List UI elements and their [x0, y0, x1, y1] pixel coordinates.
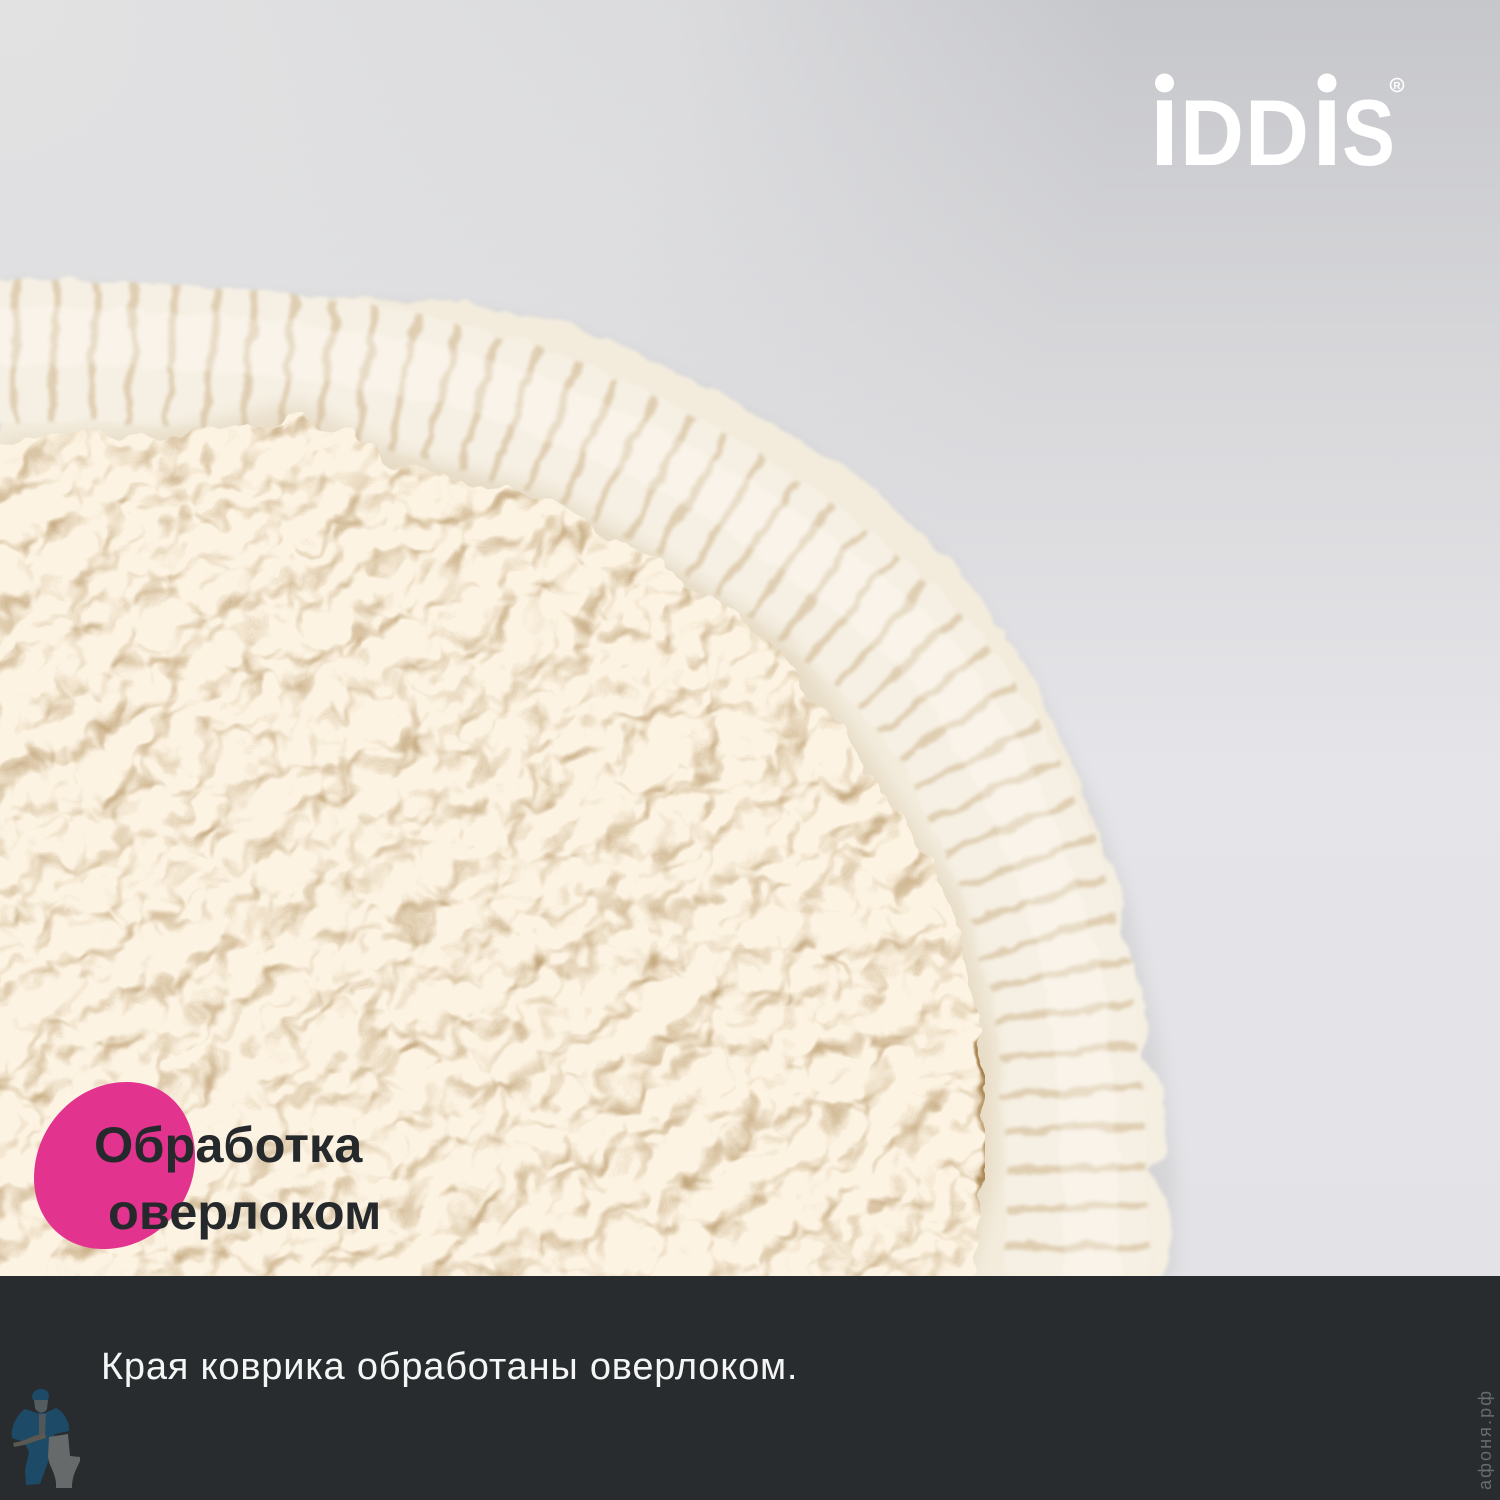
- pink blob accent: [34, 1082, 196, 1249]
- logo: IDDIS: [1150, 74, 1404, 180]
- heading: edge treatment: [94, 1116, 381, 1240]
- crochet scalloped outer edge: [1055, 825, 1173, 1287]
- dark footer bar: [0, 1276, 1500, 1500]
- icon: plumber with toilet: [12, 1389, 80, 1488]
- overlocked edge band: [0, 280, 1150, 1290]
- heading: edge treatment: Обработка: [94, 1116, 362, 1173]
- rug: [0, 280, 1176, 1320]
- heading: edge treatment: оверлоком: [108, 1183, 381, 1240]
- body text: Края коврика обработаны оверлоком.: [101, 1346, 798, 1388]
- fluffy pile: [0, 412, 985, 1320]
- logo: IDDIS: R: [1393, 81, 1401, 92]
